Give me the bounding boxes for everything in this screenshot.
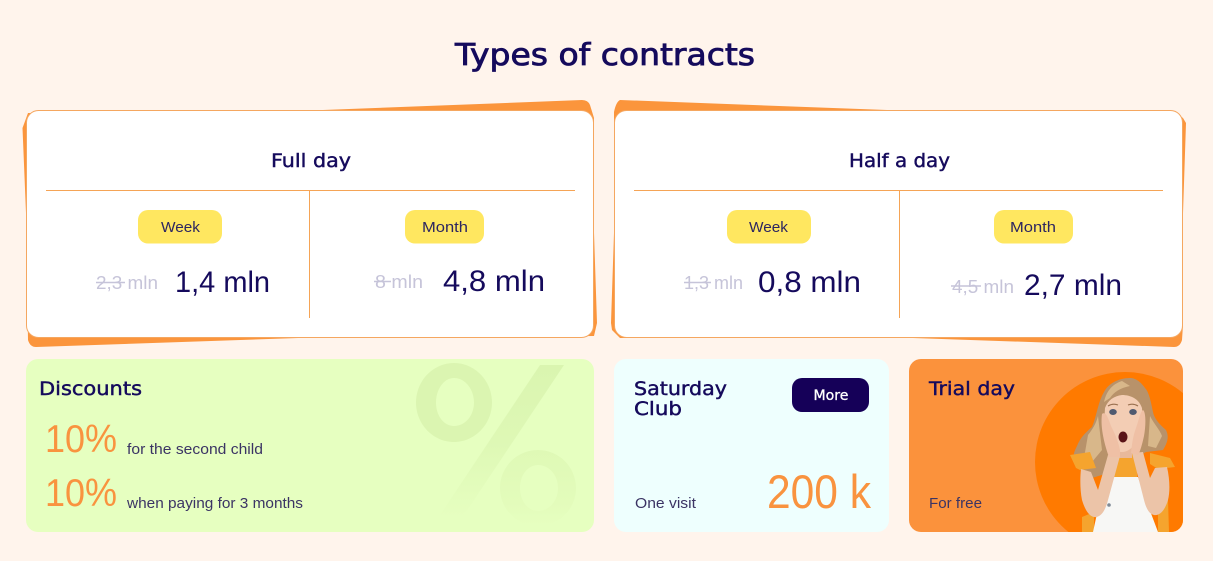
torn orange backing — [611, 100, 1186, 347]
mouth — [1118, 432, 1128, 442]
price: month — [374, 265, 545, 298]
discount row: second child: 10% — [45, 418, 117, 461]
badge: week: Week — [749, 219, 789, 236]
price: week: 2,3 mln — [96, 273, 158, 293]
illustration: surprised girl on orange circle — [1035, 372, 1183, 532]
heading: saturday club: Club — [634, 398, 682, 420]
price: month: 4,8 mln — [443, 265, 545, 298]
heading: full day: Full day — [271, 150, 351, 172]
discount row: second child — [45, 418, 263, 461]
right arm — [1132, 452, 1169, 515]
white card — [26, 110, 594, 338]
button: more: More — [814, 388, 848, 404]
neck — [1120, 448, 1132, 458]
torn orange backing — [22, 100, 597, 347]
label: one visit: One visit — [635, 496, 696, 512]
heading: trial day: Trial day — [928, 378, 1015, 400]
badge: month — [405, 210, 484, 244]
discount row: three months: when paying for 3 months — [126, 496, 303, 512]
badge: week: Week — [161, 219, 201, 236]
price: week — [96, 266, 270, 299]
hair — [1074, 378, 1168, 478]
panel: full day — [22, 100, 597, 347]
price: week: 1,3 mln — [684, 273, 743, 293]
white card — [614, 110, 1182, 338]
eyes — [1109, 409, 1137, 415]
heading: saturday club: Saturday — [634, 378, 727, 400]
price: week: 0,8 mln — [758, 266, 861, 299]
price: month: 4,5 mln — [952, 277, 1014, 297]
price: month: 8 mln — [375, 272, 423, 292]
overalls — [1093, 477, 1158, 532]
badge: month: Month — [422, 219, 468, 236]
discount row: three months: 10% — [45, 472, 117, 515]
price: month — [951, 269, 1122, 302]
price: month: 2,7 mln — [1024, 269, 1122, 302]
panel: saturday club — [614, 359, 889, 532]
panel: half a day — [611, 100, 1186, 347]
panel: trial day — [909, 359, 1183, 532]
heading: discounts: Discounts — [39, 378, 142, 400]
icon: watermark percent sign — [416, 363, 576, 526]
hands — [1102, 410, 1145, 457]
price: week — [684, 266, 861, 299]
title: Types of contracts — [454, 38, 755, 73]
badge: month — [994, 210, 1073, 244]
face — [1105, 395, 1142, 452]
heading: saturday club — [634, 378, 727, 420]
discount row: three months — [45, 472, 303, 515]
lower shirt strips — [1082, 500, 1169, 532]
left arm — [1080, 455, 1120, 517]
hair highlights — [1084, 381, 1162, 462]
price: week: 1,4 mln — [175, 266, 270, 299]
heading: half a day: Half a day — [849, 150, 950, 172]
button: more — [792, 378, 869, 412]
shirt — [1070, 452, 1175, 478]
brows — [1108, 404, 1138, 406]
badge: month: Month — [1010, 219, 1056, 236]
price: 200 k: 200 k — [767, 465, 871, 518]
badge: week — [727, 210, 811, 244]
discount row: second child: for the second child — [127, 442, 263, 458]
panel: discounts — [26, 359, 594, 532]
badge: week — [138, 210, 222, 244]
label: for free: For free — [929, 496, 982, 512]
